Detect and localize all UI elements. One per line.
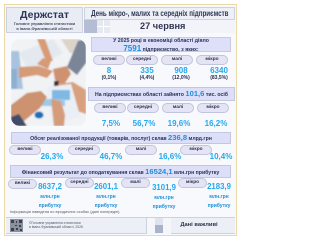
pill: medium: середні <box>133 57 151 62</box>
enterprise counts: (12,0%) <box>172 75 190 81</box>
panel: sales volume <box>11 132 231 144</box>
pill: small <box>121 178 150 188</box>
light cross bar <box>97 26 110 27</box>
QR code <box>10 219 23 232</box>
panel: financial result: Фінансовий результат до оподаткування склав 16524,1 млн.грн прибутку <box>22 167 219 176</box>
profit: medium: млн.грн <box>96 194 116 200</box>
profit: large <box>38 182 62 208</box>
pill: large <box>8 179 37 189</box>
panel text: total enterprises: 7591 підприємство, з яких: <box>123 44 199 53</box>
panel: sales volume: Обсяг реалізованої продукції (товарів, послуг) склав 236,8 млрд.грн <box>30 133 212 142</box>
light cross bar <box>103 20 104 33</box>
pill: medium <box>127 103 159 113</box>
enterprise counts: 335 <box>140 66 154 75</box>
pill: micro <box>178 178 207 188</box>
category pills: employment <box>94 103 229 113</box>
copyright: в Івано-Франківській області, 2026 <box>29 225 83 229</box>
panel: enterprises count <box>91 37 231 52</box>
profit: micro: прибутку <box>208 202 230 208</box>
profit: micro: млн.грн <box>209 194 229 200</box>
profit: small: 3101,9 <box>152 183 176 192</box>
organisation subtitle <box>14 21 75 31</box>
photo: business team at charts <box>11 39 86 126</box>
copyright: ©Головне управління статистики <box>29 221 81 225</box>
profit: medium <box>94 182 118 208</box>
panel text: year line: У 2025 році в економіці області діяло <box>113 38 209 44</box>
share: medium: 56,7% <box>133 119 155 128</box>
header: organisation block <box>6 7 83 33</box>
organisation name: Держстат <box>20 9 69 21</box>
enterprise counts <box>102 66 228 81</box>
enterprise counts: (0,1%) <box>102 75 116 81</box>
count: micro <box>210 66 228 81</box>
pill: small: малі <box>136 147 146 152</box>
profit: large: 8637,2 <box>38 182 62 191</box>
enterprise counts: 8 <box>107 66 111 75</box>
enterprise counts: 6340 <box>210 66 228 75</box>
header: title <box>84 7 235 20</box>
pill: medium: середні <box>70 180 89 185</box>
light square <box>155 218 163 225</box>
category pills: count <box>93 55 228 65</box>
pill: large: великі <box>102 105 118 110</box>
profit: large: млн.грн <box>40 194 60 200</box>
profit: micro <box>207 182 231 208</box>
pill: large <box>93 55 125 65</box>
enterprise counts: (83,5%) <box>210 75 228 81</box>
header: decorative squares <box>84 20 110 33</box>
share: medium: 46,7% <box>100 152 122 161</box>
count: medium <box>140 66 154 81</box>
sales breakdown <box>9 145 232 161</box>
profit: small: прибутку <box>153 204 175 210</box>
header: date <box>110 20 235 33</box>
pill: micro <box>180 145 212 155</box>
header: date: 27 червня <box>140 21 185 31</box>
share: micro: 16,2% <box>205 119 227 128</box>
pill: micro: мікро <box>186 180 199 185</box>
copyright <box>29 221 83 229</box>
pill: large <box>9 145 41 155</box>
pill: small <box>161 55 193 65</box>
pill: small <box>125 145 157 155</box>
pill: small: малі <box>172 57 182 62</box>
panel: financial result <box>10 165 231 178</box>
pill: small: малі <box>173 105 183 110</box>
share: small: 16,6% <box>159 152 181 161</box>
decorative squares <box>146 218 171 234</box>
data are important: Дані важливі <box>180 222 218 228</box>
page frame <box>4 4 237 236</box>
count: small <box>172 66 190 81</box>
pill: medium <box>126 55 158 65</box>
share: large: 7,5% <box>102 119 120 128</box>
pill: medium <box>68 145 100 155</box>
organisation subtitle: Головне управління статистики <box>14 21 75 26</box>
profit: micro: 2183,9 <box>207 182 231 191</box>
pill: large: великі <box>17 147 33 152</box>
pill: medium <box>65 178 94 188</box>
pill: medium: середні <box>75 147 93 152</box>
count: large <box>102 66 116 81</box>
enterprise counts: (4,4%) <box>140 75 154 81</box>
profit: medium: 2601,1 <box>94 182 118 191</box>
dark square <box>155 225 163 233</box>
pill: medium: середні <box>134 105 152 110</box>
pill: small <box>162 103 194 113</box>
pill: micro <box>196 55 228 65</box>
header: title: День мікро-, малих та середніх підприємств <box>91 9 228 18</box>
profit: medium: прибутку <box>95 202 117 208</box>
dark square <box>84 20 97 33</box>
pill: small: малі <box>130 180 141 185</box>
footnote: Інформація наведена по юридичних особах (дані попередні). <box>10 209 120 214</box>
panel: employment: На підприємствах області зайнято 101,6 тис. осіб <box>95 89 228 98</box>
panel: employment <box>88 87 235 101</box>
profit: large: прибутку <box>39 202 61 208</box>
pill: micro: мікро <box>205 57 219 62</box>
employment shares <box>102 119 228 128</box>
share: large: 26,3% <box>41 152 63 161</box>
pill: large: великі <box>15 181 30 186</box>
enterprise counts: 908 <box>174 66 188 75</box>
pill: large: великі <box>101 57 117 62</box>
footer panel <box>6 217 235 234</box>
share: micro: 10,4% <box>210 152 232 161</box>
organisation subtitle: в Івано-Франківській області <box>16 26 73 31</box>
profit: small: млн.грн <box>154 195 174 201</box>
profit breakdown <box>8 178 231 210</box>
pill: micro: мікро <box>206 105 220 110</box>
share: small: 19,6% <box>168 119 190 128</box>
pill: large <box>94 103 126 113</box>
profit: small <box>152 183 176 210</box>
pill: micro <box>197 103 229 113</box>
pill: micro: мікро <box>189 147 203 152</box>
